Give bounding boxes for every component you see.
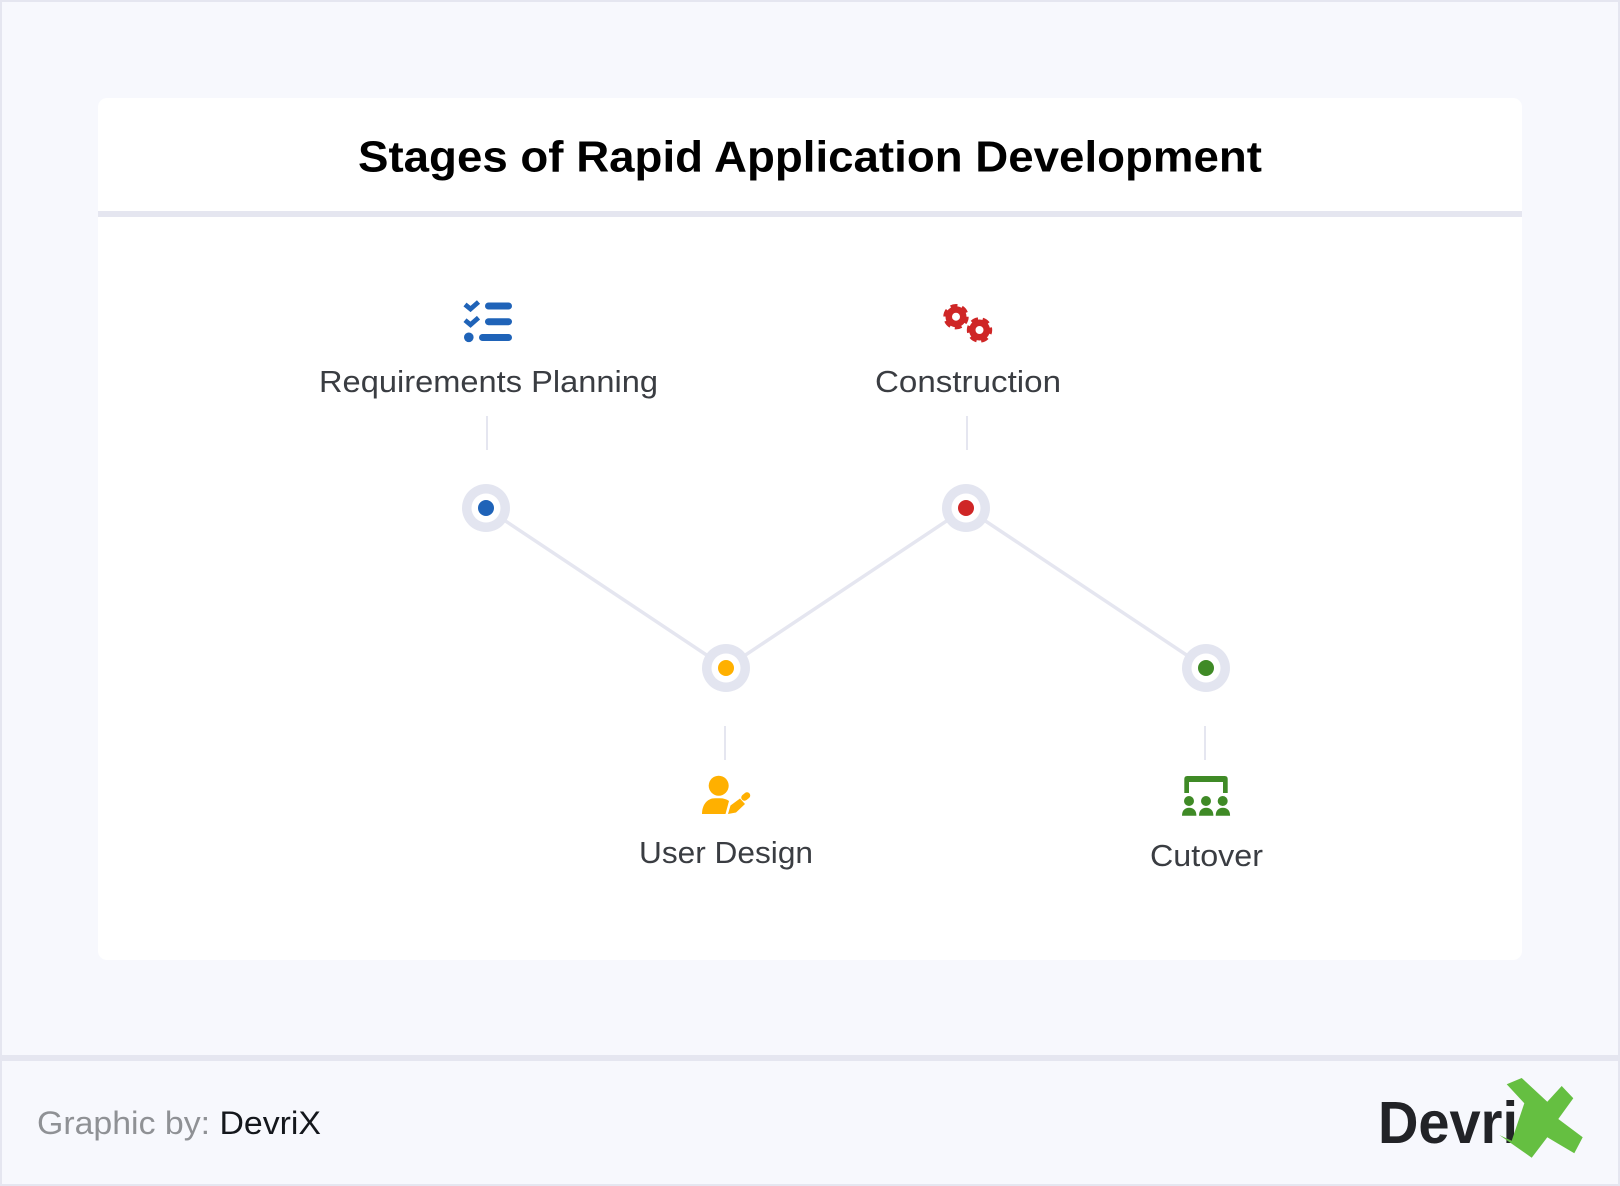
connector tick <box>486 416 488 450</box>
stage: Cutover <box>1150 644 1263 873</box>
node: yellow <box>702 644 750 692</box>
node: green <box>1182 644 1230 692</box>
node: red <box>942 484 990 532</box>
logo green X <box>1499 1078 1583 1158</box>
stage: Construction <box>875 306 1061 532</box>
footer credit: Graphic by: DevriX <box>37 1105 321 1141</box>
stage: Requirements Planning <box>319 302 658 532</box>
connecting zigzag line <box>486 508 1206 668</box>
logo: DevriX <box>1378 1078 1583 1158</box>
node: blue <box>462 484 510 532</box>
icon: gears <box>945 306 991 341</box>
connector tick <box>1204 726 1206 760</box>
footer divider <box>0 1055 1620 1061</box>
icon: audience at screen <box>1182 776 1230 816</box>
title: Stages of Rapid Application Development <box>358 132 1262 182</box>
label: Cutover: Cutover <box>1150 838 1263 873</box>
panel: main card <box>98 98 1522 960</box>
connector tick <box>966 416 968 450</box>
label: User Design: User Design <box>639 835 813 870</box>
label: Requirements Planning: Requirements Planning <box>319 364 658 399</box>
label: Construction: Construction <box>875 364 1061 399</box>
connector tick <box>724 726 726 760</box>
icon: user with pen <box>702 776 747 814</box>
stage: User Design <box>639 644 813 870</box>
icon: checklist <box>464 302 512 342</box>
logo wordmark: Devri <box>1378 1090 1518 1156</box>
